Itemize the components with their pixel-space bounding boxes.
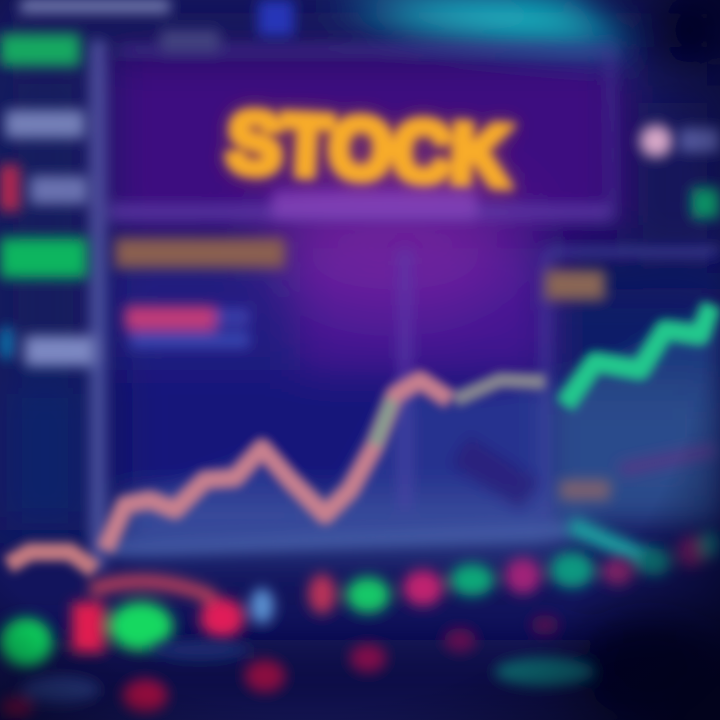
sidebar row: blue marker <box>0 328 13 358</box>
sidebar row: blue label <box>25 336 95 366</box>
legend: pink and blue lines <box>125 306 250 348</box>
right label: orange <box>545 270 605 300</box>
panel frame lines <box>98 40 720 570</box>
secondary lower right lines <box>460 450 715 560</box>
sidebar row: grey <box>5 110 85 138</box>
sidebar row: grey label <box>30 176 88 204</box>
chart label: orange <box>115 238 285 268</box>
area under line chart <box>110 385 550 550</box>
right top label <box>680 128 720 152</box>
line: green rising <box>565 305 712 405</box>
area under right chart <box>555 310 720 520</box>
candlestick row: lower bright markers <box>0 531 720 666</box>
panel: dark bottom right corner <box>580 620 720 720</box>
icon: top cyan light <box>330 0 640 48</box>
top mid label <box>160 30 220 52</box>
heading: STOCK glow: STOCK <box>225 95 512 203</box>
sidebar row: green bar <box>0 238 87 278</box>
right top green marker <box>692 188 720 218</box>
top blue chip <box>258 0 294 36</box>
top sidebar label <box>20 0 170 12</box>
subheading blurred text <box>272 190 477 218</box>
right top icon <box>640 125 672 157</box>
line chart <box>105 305 712 550</box>
small left line <box>8 552 95 570</box>
panel: central purple glow <box>265 175 525 315</box>
sidebar row: green <box>0 34 80 66</box>
panel: dark top right corner <box>660 0 720 60</box>
heading: STOCK: STOCK <box>225 95 512 203</box>
left sidebar ticker rows <box>0 0 294 366</box>
candlestick row: lower dim markers <box>0 615 595 718</box>
sidebar row: red marker <box>0 165 19 211</box>
